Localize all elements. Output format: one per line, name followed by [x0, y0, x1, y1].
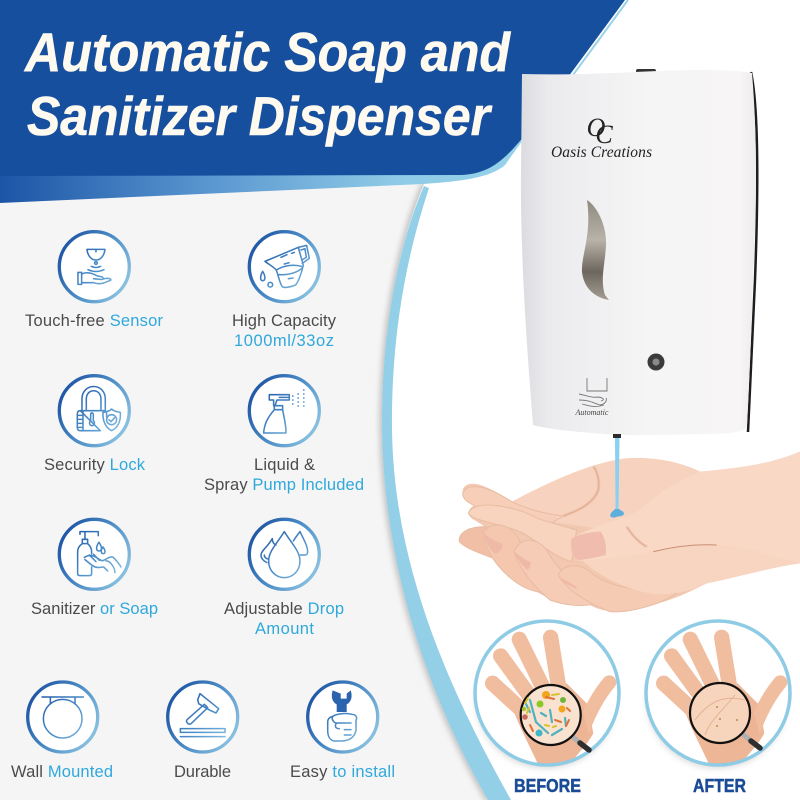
header blue banner: [0, 0, 625, 176]
magnifier lens clean: [690, 683, 750, 743]
front ring finger: [514, 540, 593, 605]
front little finger: [558, 566, 680, 612]
dispenser black side edge: [748, 72, 757, 432]
feature: high capacity: [232, 232, 337, 350]
dispenser logo: Oasis Creations: [551, 144, 652, 161]
label: Adjustable Drop: [224, 600, 344, 618]
icon: round wall mount: [28, 682, 98, 752]
after label: AFTER: [693, 776, 746, 796]
magnifier handle: [573, 737, 589, 750]
dispenser hand icon: [579, 378, 607, 407]
feature: durable: [168, 682, 238, 781]
dispenser body: [521, 70, 756, 435]
title: Sanitizer Dispenser: [27, 85, 492, 147]
circle backing: [646, 621, 790, 765]
label: Amount: [255, 620, 314, 638]
hand photo: [493, 637, 609, 765]
title: [23, 21, 511, 147]
hands silhouette: [459, 452, 800, 611]
label: Touch-free Sensor: [25, 312, 164, 330]
hand photo: [664, 637, 780, 765]
feature: sanitizer or soap: [31, 519, 158, 618]
icon: wrench in fist: [308, 682, 378, 752]
circle shadow: [475, 629, 617, 769]
thumb and wrist: [571, 452, 800, 563]
label: Sanitizer or Soap: [31, 600, 158, 618]
soap stream: [610, 438, 624, 518]
label: [232, 312, 337, 350]
label: Liquid &: [254, 456, 315, 474]
label: Easy to install: [290, 763, 395, 781]
label: High Capacity: [232, 312, 337, 330]
label: Durable: [174, 763, 231, 781]
icon: gavel: [168, 682, 238, 752]
lower back finger: [459, 527, 520, 563]
icon: soap bottle and hand: [59, 519, 129, 589]
icon: three drops: [249, 519, 319, 589]
finger nails: [483, 533, 577, 589]
product: dispenser: [521, 69, 757, 438]
back palm: [512, 458, 717, 530]
panel edge shadow: [384, 184, 490, 800]
dispenser logo: [551, 113, 652, 161]
magnifier handle: [744, 735, 760, 748]
curved light blue band: [382, 186, 511, 800]
dispenser top button: [636, 69, 656, 75]
header gradient strip: [0, 120, 530, 203]
circle shadow: [646, 629, 788, 769]
label: [224, 600, 344, 638]
icon: padlock and shield: [59, 376, 129, 446]
ring: [475, 621, 619, 765]
dispenser logo: O: [587, 113, 606, 142]
feature: adjustable drop amount: [224, 519, 344, 638]
feature: easy to install: [290, 682, 395, 781]
header diagonal light edge: [540, 0, 628, 120]
after circle: [646, 621, 790, 769]
feature: liquid and spray pump: [204, 376, 364, 494]
icon: sensor over hand: [59, 232, 129, 302]
label: [204, 456, 364, 494]
front index finger: [468, 505, 577, 562]
before circle: [475, 621, 619, 769]
thumb shading: [563, 467, 647, 547]
dispenser logo: C: [595, 120, 613, 149]
label: 1000ml/33oz: [234, 332, 334, 350]
dispenser sensor: [648, 354, 664, 370]
icon: measuring jug: [249, 232, 319, 302]
soap splash: [610, 509, 624, 518]
feature: touch-free sensor: [25, 232, 164, 330]
ring: [646, 621, 790, 765]
lower palm: [582, 545, 800, 594]
title: Automatic Soap and: [23, 21, 511, 83]
feature: wall mounted: [11, 682, 113, 781]
label: Security Lock: [44, 456, 146, 474]
thumb nail: [571, 532, 606, 560]
dispenser automatic label: Automatic: [575, 408, 609, 417]
icon: spray bottle: [249, 376, 319, 446]
label: Wall Mounted: [11, 763, 113, 781]
front middle finger: [484, 525, 557, 595]
circle backing: [475, 621, 619, 765]
dispenser nozzle: [613, 434, 621, 438]
thumb crease: [653, 545, 717, 552]
label: Spray Pump Included: [204, 476, 364, 494]
before label: BEFORE: [514, 776, 581, 796]
photo: cupped hands: [459, 452, 800, 612]
panel: features background: [0, 184, 488, 800]
dispenser silver window: [582, 200, 609, 300]
top back finger: [463, 487, 563, 530]
magnifier lens with germs: [521, 685, 581, 745]
feature: security lock: [44, 376, 146, 474]
